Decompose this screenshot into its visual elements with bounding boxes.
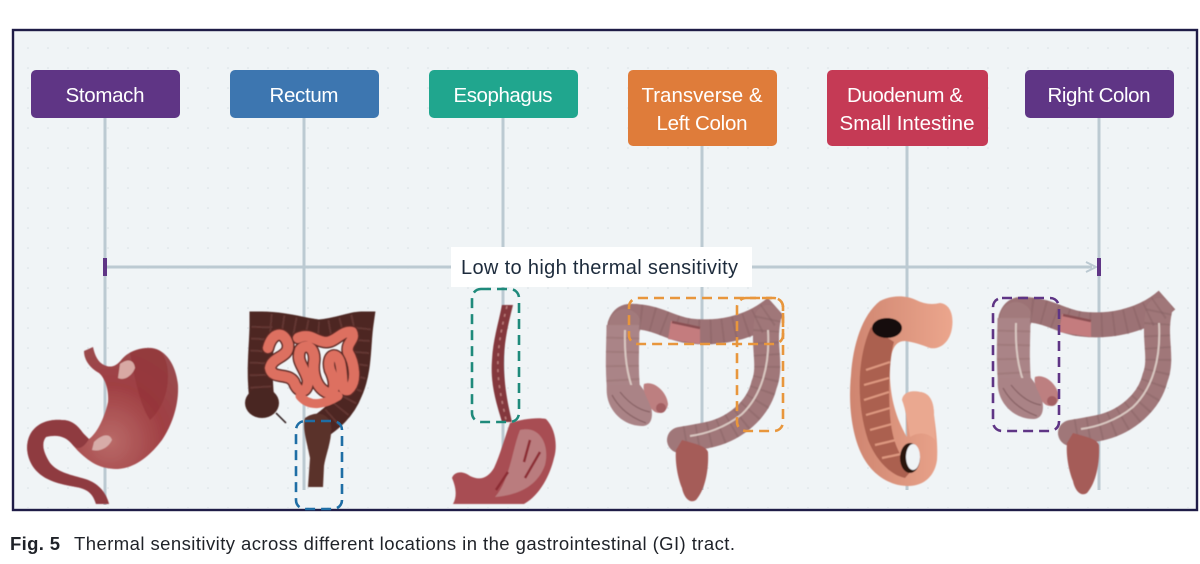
- icon: transverse and left colon: [607, 307, 776, 501]
- heading: Transverse and Left Colon: [628, 70, 777, 146]
- heading: Right Colon: [1025, 70, 1174, 118]
- icon: esophagus and stomach: [452, 305, 556, 504]
- connector lines: [105, 118, 1099, 505]
- caption: Fig. 5: [10, 533, 60, 554]
- icon: colon and small intestine: [245, 324, 361, 487]
- icon: duodenum and small intestine: [850, 296, 952, 486]
- heading: Transverse and Left Colon: Transverse &: [642, 84, 763, 107]
- heading: Rectum: Rectum: [270, 84, 338, 107]
- callout: esophagus dashed box: [472, 289, 519, 422]
- icon: stomach: [27, 347, 178, 504]
- callout: right colon dashed box: [993, 298, 1059, 431]
- heading: Rectum: [230, 70, 379, 118]
- callout: rectum dashed box: [296, 421, 342, 509]
- callout: left colon dashed box: [737, 298, 783, 431]
- label: low to high thermal sensitivity: Low to high thermal sensitivity: [461, 257, 738, 279]
- heading: Duodenum and Small Intestine: Duodenum &: [847, 84, 963, 107]
- icon: right colon: [998, 300, 1167, 494]
- heading: Esophagus: [429, 70, 578, 118]
- heading: Esophagus: Esophagus: [454, 84, 552, 107]
- arrow: low to high thermal sensitivity: [103, 258, 1101, 276]
- heading: Right Colon: Right Colon: [1048, 84, 1150, 107]
- heading: Transverse and Left Colon: Left Colon: [656, 112, 748, 135]
- callout: transverse colon dashed box: [629, 298, 783, 344]
- caption: Thermal sensitivity across different locations in the gastrointestinal (GI) tract.: [74, 533, 735, 554]
- label: low to high thermal sensitivity: [451, 247, 752, 287]
- heading: Duodenum and Small Intestine: Small Intestine: [840, 112, 974, 135]
- heading: Stomach: Stomach: [66, 84, 144, 107]
- heading: Duodenum and Small Intestine: [827, 70, 988, 146]
- heading: Stomach: [31, 70, 180, 118]
